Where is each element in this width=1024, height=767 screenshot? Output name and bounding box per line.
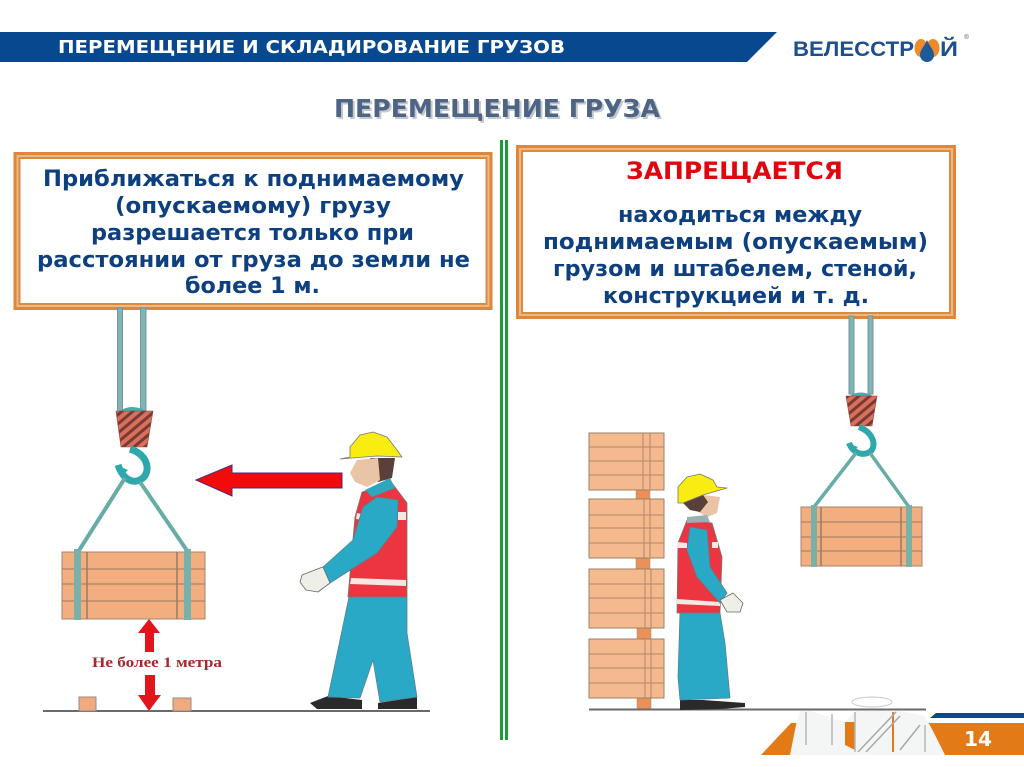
crate 1 <box>589 433 664 490</box>
hook <box>847 427 874 454</box>
plant illustration <box>790 697 945 755</box>
big red arrow <box>196 465 342 496</box>
hook <box>116 449 147 481</box>
slings <box>814 453 909 507</box>
prohibition body <box>543 203 928 309</box>
left ground <box>43 697 430 712</box>
panel: permitted approach text: более 1 м. <box>185 273 320 299</box>
panel: permitted approach text: расстоянии от груза до земли не <box>37 247 470 273</box>
panel: permitted approach text: Приближаться к поднимаемому <box>43 166 464 192</box>
crate 2 <box>589 499 664 558</box>
crane ropes <box>118 308 146 412</box>
head <box>683 495 720 517</box>
height arrow down <box>138 675 161 711</box>
center divider <box>500 140 508 740</box>
logo: ® <box>963 33 970 41</box>
crate 4 <box>589 639 664 698</box>
footer band <box>761 697 1024 755</box>
vest <box>677 520 722 613</box>
panel: permitted approach text: (опускаемому) грузу <box>115 193 391 219</box>
right crane load <box>801 316 922 567</box>
crate <box>62 549 205 620</box>
logo <box>793 33 970 62</box>
prohibition body: находиться между <box>618 203 862 228</box>
head <box>350 458 395 487</box>
crate <box>801 505 922 567</box>
panel: prohibition text <box>518 146 954 318</box>
logo: Й <box>940 37 958 61</box>
prohibition body: конструкцией и т. д. <box>603 284 869 309</box>
hook block <box>116 407 153 447</box>
hook block <box>846 392 877 426</box>
trousers <box>328 597 417 702</box>
left worker <box>300 432 417 709</box>
height label: Не более 1 метра <box>92 655 223 671</box>
height arrow up <box>138 619 160 652</box>
hard hat <box>678 474 727 503</box>
main heading: ПЕРЕМЕЩЕНИЕ ГРУЗА <box>334 94 661 123</box>
header bar <box>0 32 777 62</box>
boots <box>310 696 417 709</box>
right worker <box>677 474 745 710</box>
left crane load <box>62 308 205 620</box>
vest <box>348 483 407 597</box>
crane ropes <box>849 316 873 394</box>
prohibition body: поднимаемым (опускаемым) <box>543 230 928 255</box>
panel: permitted approach text <box>15 154 491 308</box>
crate 3 <box>589 569 664 628</box>
panel: permitted approach text: разрешается только при <box>91 220 414 246</box>
hard hat <box>340 432 402 459</box>
prohibition heading: ЗАПРЕЩАЕТСЯ <box>626 157 843 185</box>
glove <box>720 593 743 612</box>
logo: ВЕЛЕССТР <box>793 38 914 61</box>
main heading: ПЕРЕМЕЩЕНИЕ ГРУЗА <box>336 96 663 125</box>
header title: ПЕРЕМЕЩЕНИЕ И СКЛАДИРОВАНИЕ ГРУЗОВ <box>58 37 565 58</box>
prohibition body: грузом и штабелем, стеной, <box>553 257 917 282</box>
trousers <box>678 613 730 700</box>
spacers <box>636 490 651 710</box>
wood stack <box>589 433 664 710</box>
page number: 14 <box>964 727 992 751</box>
boots <box>680 700 745 710</box>
glove <box>300 567 330 592</box>
arm <box>687 527 727 603</box>
right ground <box>589 708 926 710</box>
arm <box>323 497 398 583</box>
slings <box>78 478 188 552</box>
